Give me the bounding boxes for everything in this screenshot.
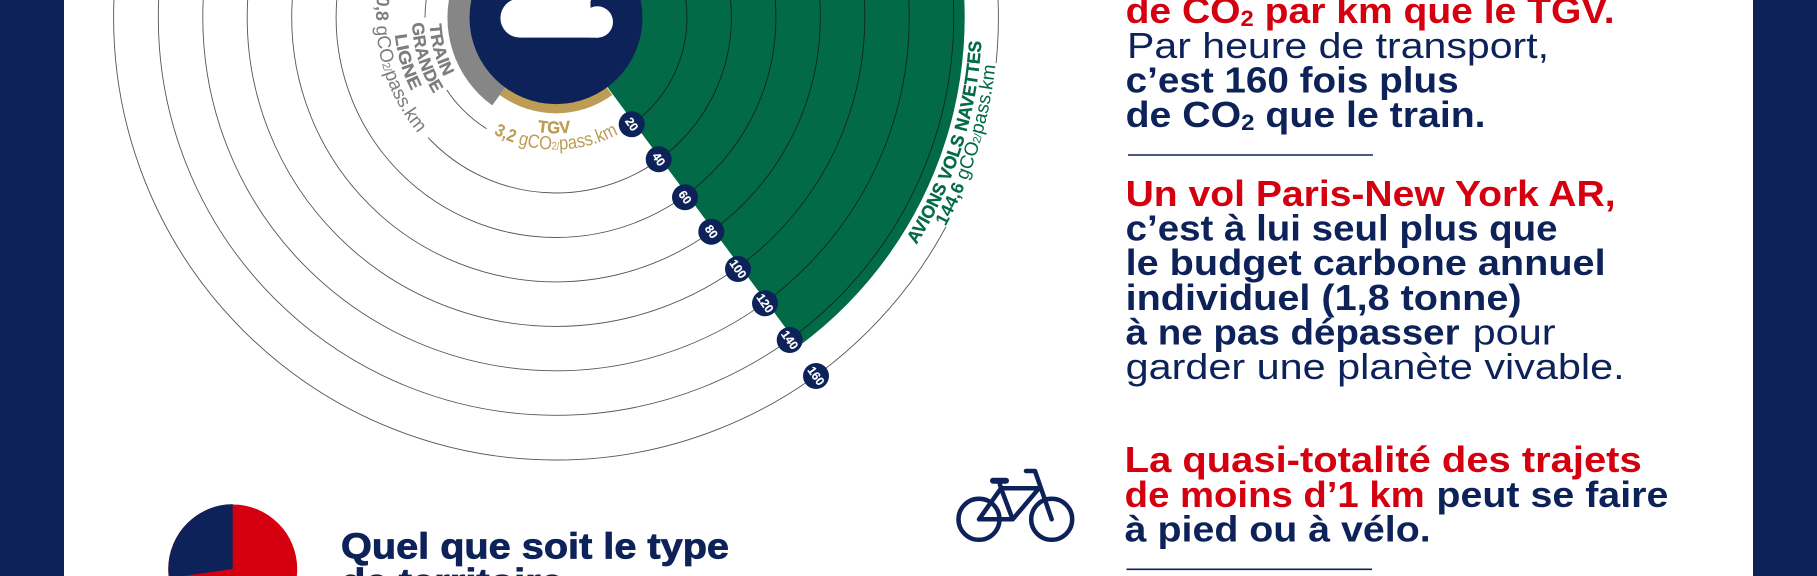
text block: Paris-New York flight: le budget carbone annuel [1126,242,1606,283]
scale rings [114,0,998,460]
text block: plane versus TGV: 2 [1241,6,1254,31]
right navy side band [1753,0,1817,576]
text block: Paris-New York flight: individuel (1,8 tonne) [1126,277,1522,318]
text block: Paris-New York flight: c’est à lui seul plus que [1126,208,1558,248]
text block: plane versus TGV: 2 [1241,110,1254,135]
text block: Paris-New York flight [1126,173,1625,387]
text block: Paris-New York flight: à ne pas dépasser [1126,312,1460,352]
text block: plane versus TGV: c’est 160 fois plus [1126,59,1459,100]
sector: planes, shuttle flights [556,0,965,346]
text block: plane versus TGV: Par heure de transport, [1127,25,1549,66]
text block: Paris-New York flight: pour [1473,312,1556,352]
scale badges: 100 [727,257,750,281]
text block: plane versus TGV [1126,0,1615,135]
left navy side band [0,0,64,576]
label: TGV: TGV [538,120,570,134]
icon: bicycle [958,471,1072,540]
scale badges: 60 [675,188,695,207]
text block: territory type: Quel que soit le type [341,525,729,566]
radial chart: CO2 per passenger km [113,0,999,460]
sector: TGV [500,18,612,113]
scale badges: 40 [649,150,668,169]
label: long-distance train: LIGNE [394,34,422,90]
text block: short trips [1125,439,1668,550]
label: long-distance train [372,0,454,132]
pie chart [168,504,297,576]
scale badges: 140 [778,328,801,352]
sector: long-distance train [447,0,556,105]
icon: CO2 cloud [500,0,613,38]
scale badges: 160 [805,364,828,388]
scale badges: 120 [754,291,777,316]
scale badges: 80 [702,222,721,241]
text block: short trips: La quasi-totalité des trajets [1125,439,1642,480]
label: planes, shuttle flights: AVIONS VOLS NAVETTES [908,41,982,245]
scale badges: 20 [622,115,641,134]
scale badges [619,111,829,389]
text block: short trips: de moins d’1 km [1125,474,1425,515]
text block: plane versus TGV: de CO [1126,94,1232,135]
label: long-distance train: TRAIN [430,23,454,76]
label: long-distance train: GRANDE [412,22,444,94]
central navy disc [470,0,642,104]
text block: Paris-New York flight: Un vol Paris-New York AR, [1126,173,1616,214]
text block: plane versus TGV: que le train. [1254,94,1486,135]
label: TGV: 3,2 gCO2/pass.km [495,124,618,154]
text block: short trips: à pied ou à vélo. [1125,509,1431,550]
text block: short trips: peut se faire [1436,474,1668,515]
text block: Paris-New York flight: garder une planète vivable. [1126,346,1625,387]
label: planes, shuttle flights: 144,6 gCO2/pass.km [936,66,996,226]
